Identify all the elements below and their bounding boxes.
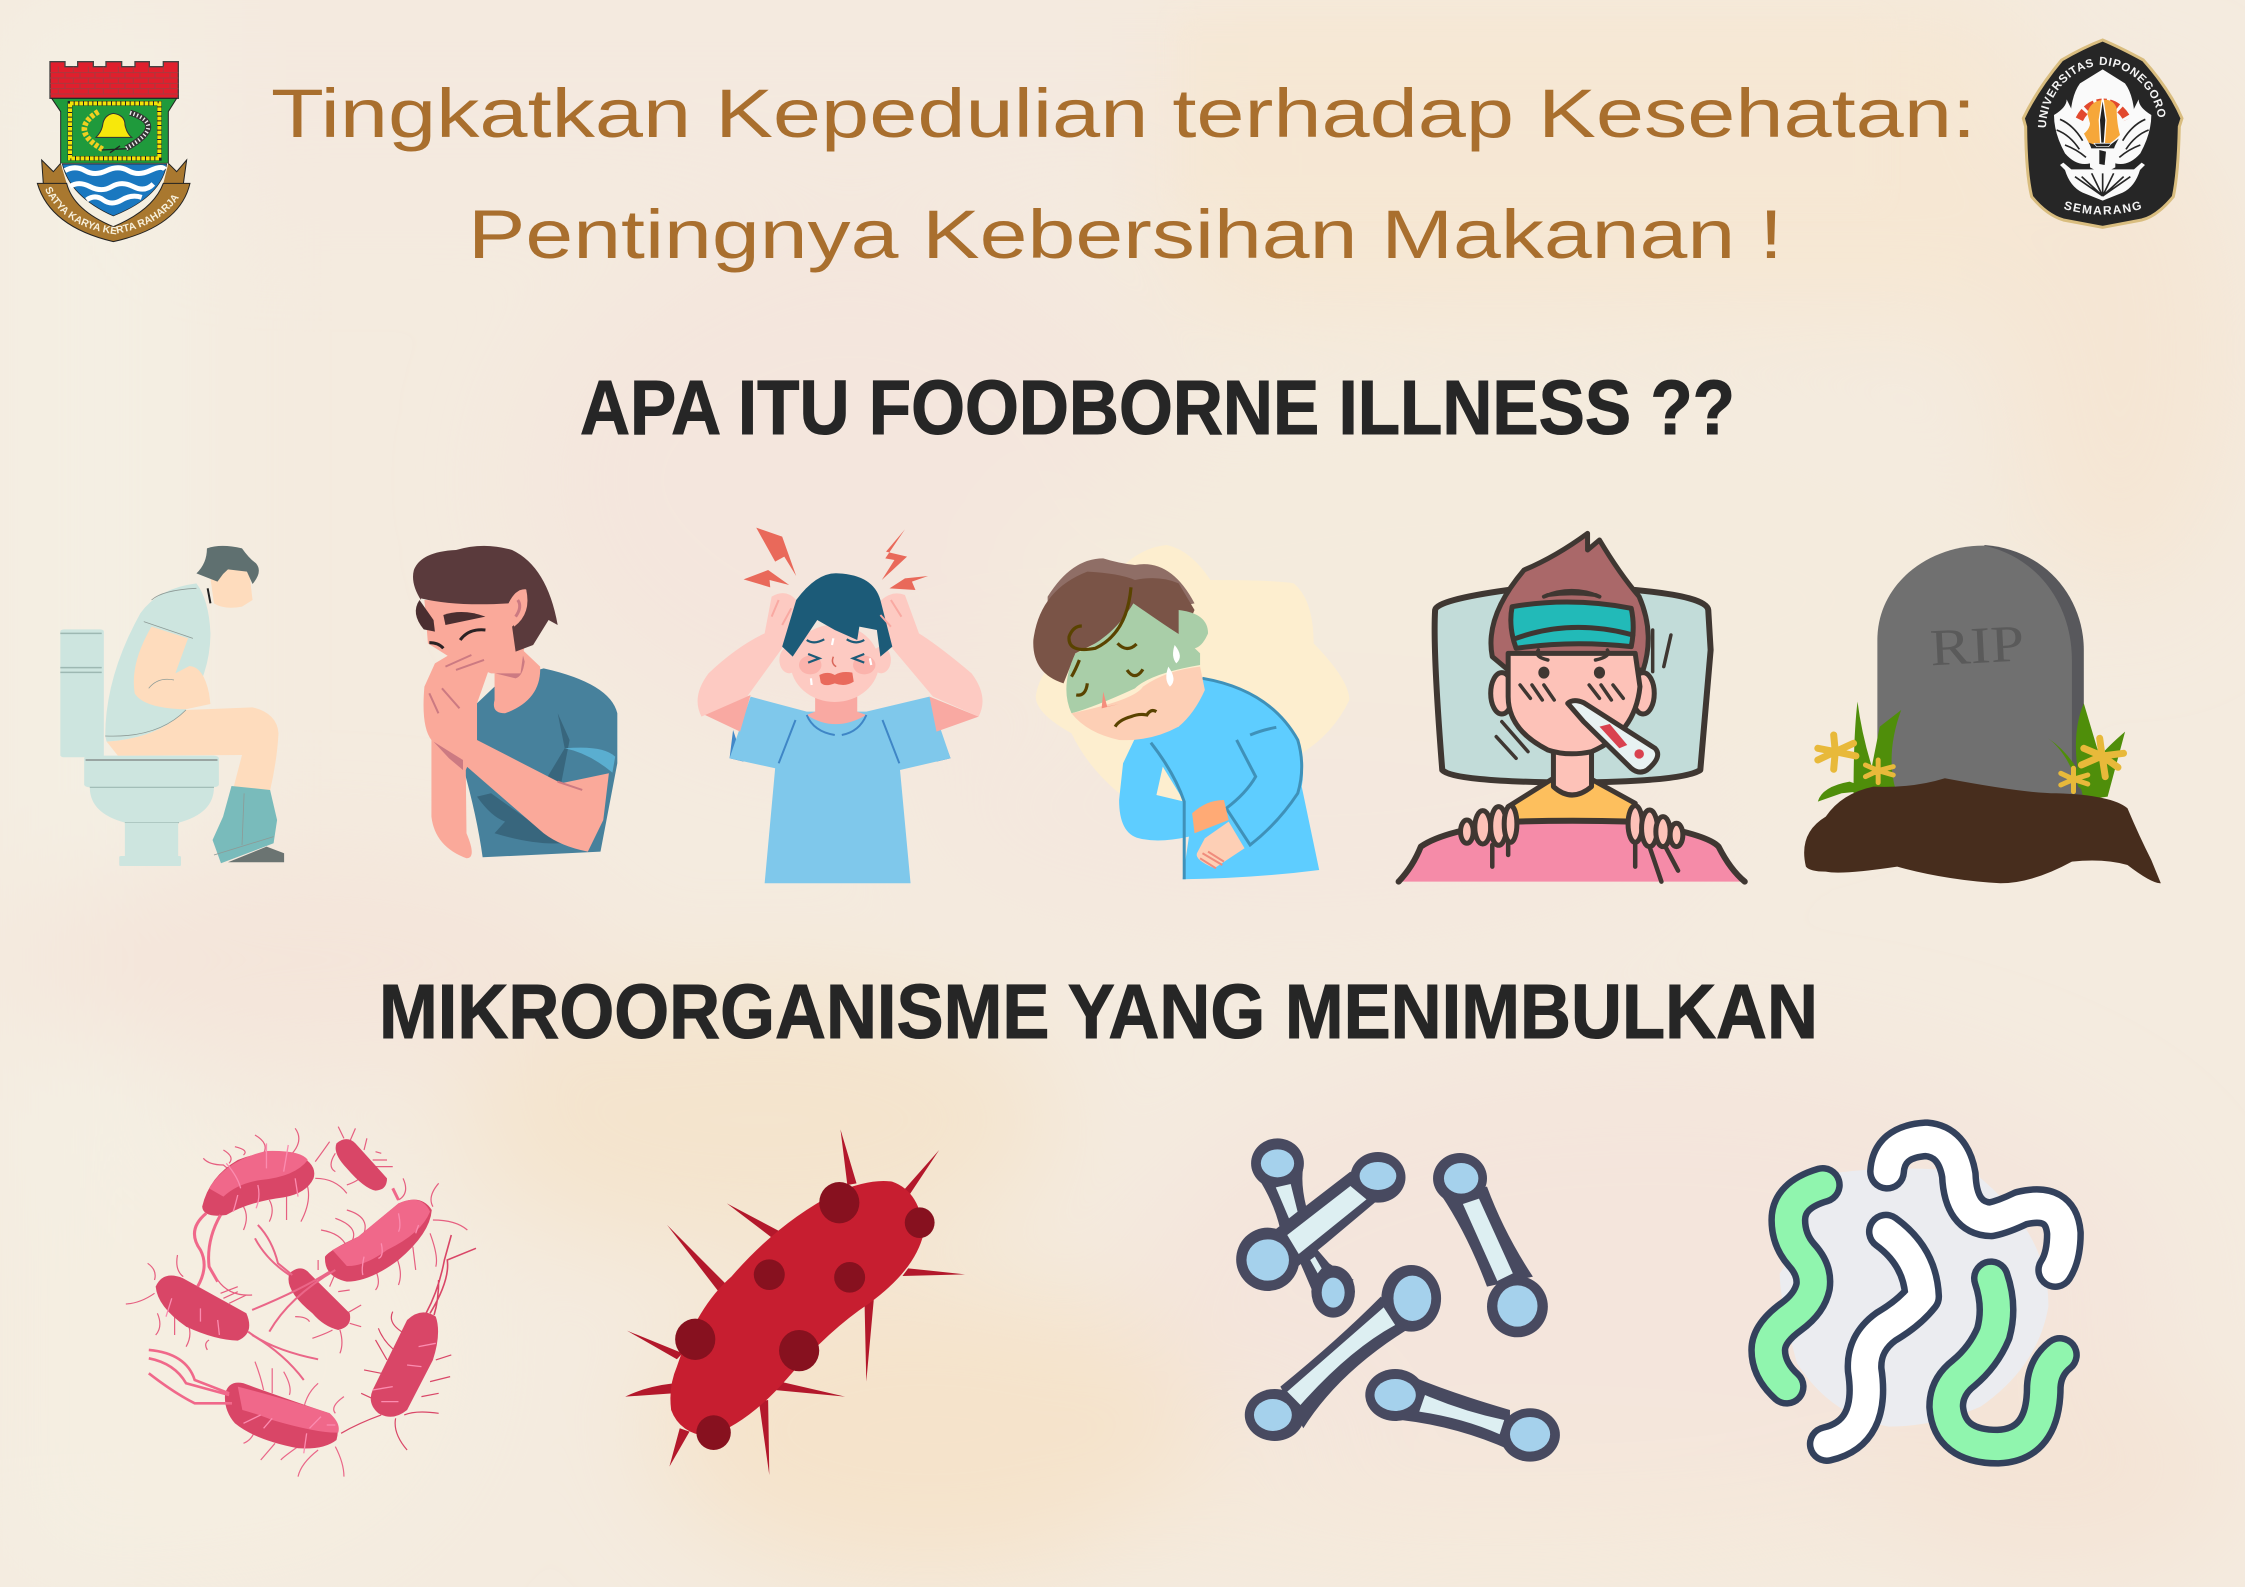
logo arc text: UNIVERSITAS DIPONEGORO — [2038, 56, 2166, 128]
symptom icons row, part 1 — [60, 528, 983, 883]
icon: person in bed with fever — [1399, 533, 1745, 882]
icon: worm-like bacteria — [1768, 1139, 2064, 1447]
icon: person vomiting — [413, 546, 617, 858]
heading: microorganisms: MIKROORGANISME YANG MENIMBULKAN — [379, 969, 1818, 1055]
icon: rod bacteria with round ends — [1236, 1138, 1560, 1462]
logo city name: SEMARANG — [2064, 202, 2142, 215]
icon: gravestone — [1804, 545, 2161, 883]
icon: nauseous person — [1033, 545, 1349, 879]
icon: red spiky bacterium — [625, 1129, 965, 1475]
icon: pink bacteria cluster — [126, 1127, 476, 1477]
title line 1: Tingkatkan Kepedulian terhadap Kesehatan: — [271, 75, 1976, 152]
microorganism icons, part 1 — [126, 1127, 965, 1477]
heading: foodborne illness: APA ITU FOODBORNE ILLNESS ?? — [580, 365, 1735, 451]
title — [271, 75, 1976, 273]
icon: person with headache — [698, 528, 983, 883]
logo: Kabupaten crest — [36, 61, 191, 242]
title line 2: Pentingnya Kebersihan Makanan ! — [468, 196, 1783, 273]
logo motto: SATYA KARYA KERTA RAHARJA — [46, 186, 179, 234]
microorganism icons, part 2 — [1236, 1138, 2064, 1462]
logo: Universitas Diponegoro — [2022, 38, 2184, 229]
symptom icons row, part 2 — [1033, 533, 2161, 883]
icon: person on toilet with diarrhea — [60, 546, 284, 866]
gravestone inscription: RIP — [1929, 615, 2026, 677]
